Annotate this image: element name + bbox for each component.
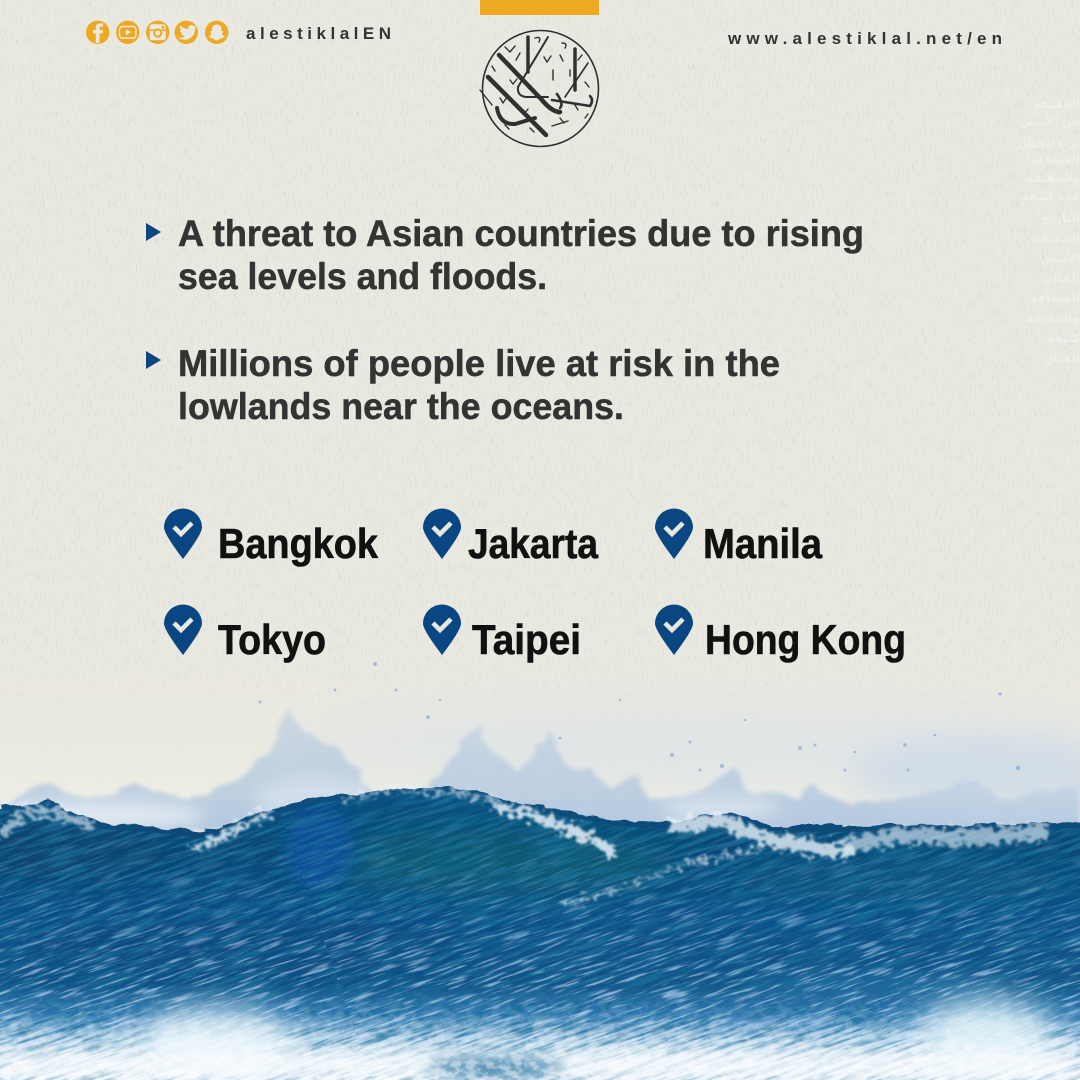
faint arabic newspaper text: الأبيض (1041, 250, 1080, 265)
city: Hong Kong: Hong Kong (705, 616, 906, 663)
city: Hong Kong (655, 604, 906, 663)
faint arabic newspaper text: والحقيقة (1026, 311, 1080, 326)
faint arabic newspaper text: الفنان (1043, 271, 1080, 285)
faint arabic newspaper text: والحقيقة (1026, 171, 1080, 186)
icon: facebook (86, 21, 109, 44)
heading line: A threat to Asian countries due to rising (178, 213, 864, 254)
faint arabic newspaper text: الحقيقة (1033, 97, 1080, 111)
crest foam (0, 790, 1040, 905)
faint arabic newspaper text: الشجاعة (1031, 291, 1080, 305)
city: Tokyo (164, 604, 326, 663)
city: Taipei: Taipei (472, 616, 581, 663)
city: Jakarta: Jakarta (468, 520, 599, 567)
faint arabic newspaper text: عدة كثيفة (1022, 189, 1080, 203)
heading line: Millions of people live at risk in the (178, 343, 780, 384)
icon: bullet (146, 223, 161, 241)
foam at base of wave (0, 990, 1080, 1080)
ocean wave (0, 780, 1080, 1080)
city: Tokyo: Tokyo (218, 616, 326, 663)
faint arabic newspaper text: براء الفنان (1018, 136, 1080, 150)
faint arabic newspaper text: كثيفة (1047, 331, 1080, 345)
icon: youtube (116, 21, 139, 44)
city: Bangkok: Bangkok (218, 520, 379, 567)
website: www.alestiklal.net/en (727, 29, 1002, 48)
social handle: alestiklalEN (246, 24, 391, 43)
faint arabic newspaper text: الفنان (1043, 351, 1080, 365)
logo emblem (480, 30, 598, 146)
city: Manila (655, 509, 823, 567)
heading line (178, 343, 780, 427)
text block: second bullet (146, 343, 780, 427)
social icons (86, 21, 228, 44)
icon: instagram (146, 21, 169, 44)
heading line: sea levels and floods. (178, 256, 547, 297)
city: Jakarta (423, 509, 599, 567)
icon: twitter (175, 21, 198, 44)
ocean spray mist (0, 662, 1080, 840)
faint arabic newspaper text (1018, 97, 1080, 365)
faint arabic newspaper text: الشجاعة (1031, 152, 1080, 166)
city: Manila: Manila (703, 520, 823, 567)
heading line (178, 213, 864, 297)
city list (164, 509, 906, 663)
city: Bangkok (164, 509, 379, 567)
faint arabic newspaper text: من الأبيض (1020, 113, 1080, 128)
city: Taipei (423, 604, 581, 663)
icon: snapchat (205, 21, 228, 44)
top accent bar (480, 0, 599, 15)
heading line: lowlands near the oceans. (178, 386, 624, 427)
icon: bullet (146, 351, 161, 369)
faint arabic newspaper text: الحقيقة (1033, 231, 1080, 245)
faint arabic newspaper text: التاريخ (1042, 211, 1080, 225)
text block: first bullet (146, 213, 864, 297)
wave shading: crest and trough tones (0, 806, 1080, 997)
